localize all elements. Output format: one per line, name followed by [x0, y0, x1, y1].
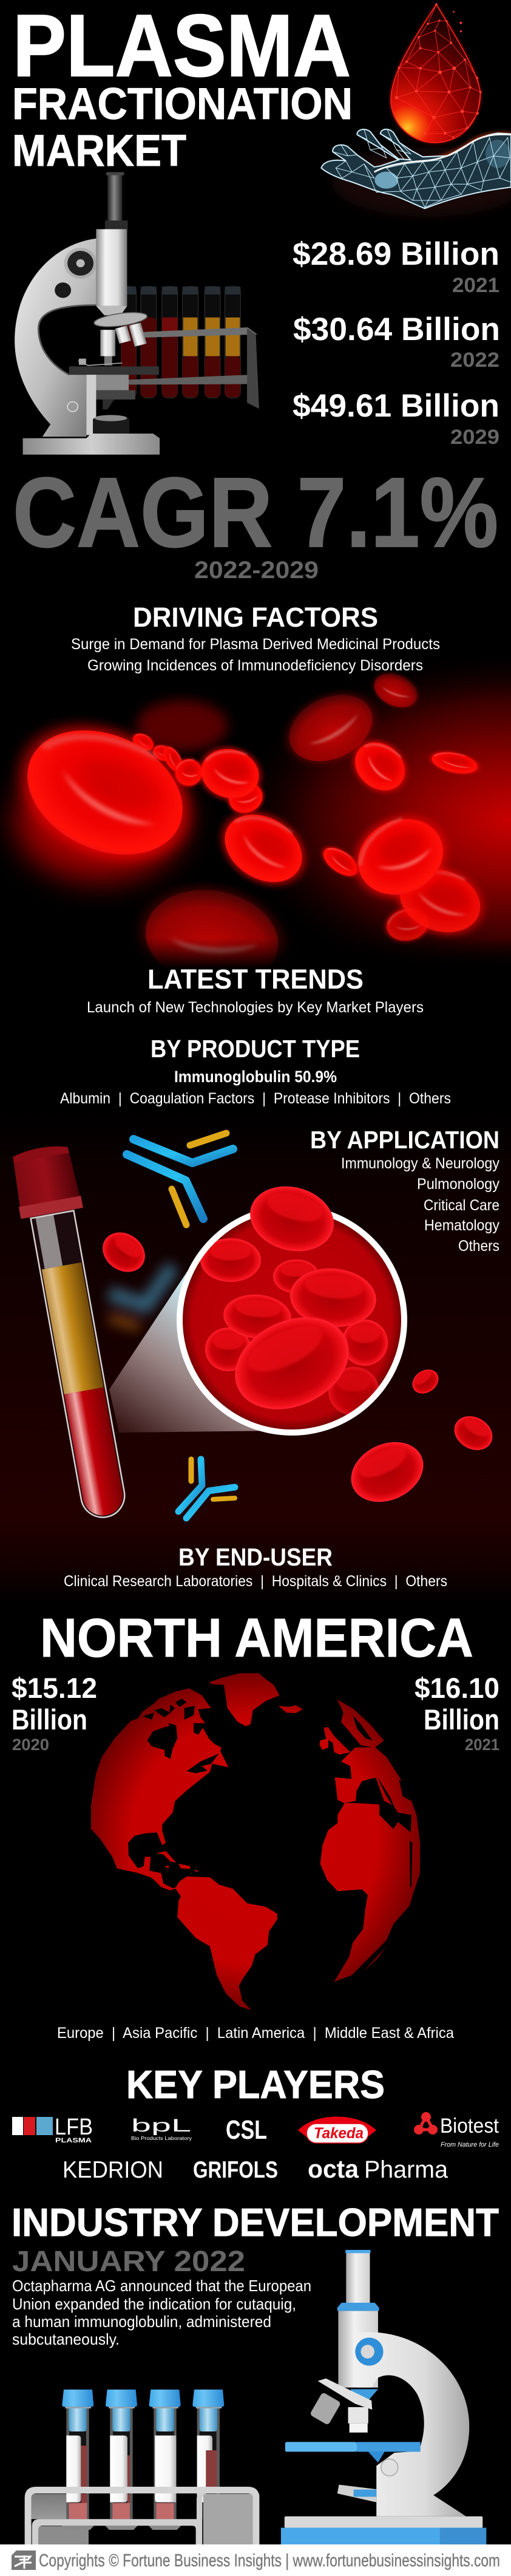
- icon: blood collection tube: [9, 1142, 138, 1522]
- icon: silver microscope: [15, 172, 160, 455]
- logo: Biotest: From Nature for Life: [441, 2141, 499, 2148]
- market size figures: 2029: [450, 426, 499, 449]
- section background: maroon panel: [0, 1111, 511, 1603]
- heading: by application: Hematology: [424, 1217, 499, 1234]
- regional values: $15.12: [12, 1672, 97, 1704]
- icon: white and blue microscope: [281, 2250, 486, 2545]
- icon: blood drop held by wireframe hand: [321, 3, 511, 217]
- logo: Biotest: Biotest: [440, 2114, 499, 2138]
- heading: by end-user: Clinical Research Laboratories | Hospitals & Clinics | Others: [64, 1573, 447, 1590]
- regional values: [12, 1672, 499, 1754]
- heading: latest trends: LATEST TRENDS: [147, 964, 364, 995]
- regional values: 2020: [12, 1736, 49, 1754]
- market size figures: $28.69 Billion: [293, 236, 499, 272]
- heading: north america: NORTH AMERICA: [40, 1608, 473, 1669]
- heading: by application: Critical Care: [424, 1197, 499, 1214]
- heading: latest trends: Launch of New Technologies by Key Market Players: [87, 999, 424, 1016]
- heading: by end-user: [64, 1543, 447, 1590]
- logo: LFB Plasma: PLASMA: [55, 2137, 92, 2144]
- heading: by application: Immunology & Neurology: [341, 1155, 499, 1172]
- regional values: Billion: [12, 1703, 87, 1736]
- development date: JANUARY 2022: [12, 2246, 245, 2278]
- development description: subcutaneously.: [12, 2330, 120, 2348]
- logo: Grifols: GRIFOLS: [193, 2157, 278, 2183]
- magnified blood circle: [180, 1177, 404, 1433]
- regional values: Billion: [424, 1703, 499, 1736]
- title: MARKET: [12, 126, 186, 175]
- logo: LFB Plasma: [12, 2114, 93, 2144]
- heading: key players: KEY PLAYERS: [126, 2062, 385, 2107]
- logo: Kedrion: KEDRION: [63, 2157, 163, 2183]
- heading: driving factors: Growing Incidences of Immunodeficiency Disorders: [87, 657, 423, 674]
- heading: by product type: Immunoglobulin 50.9%: [174, 1068, 337, 1086]
- logo: BPL: [131, 2116, 192, 2141]
- market size figures: 2021: [452, 274, 499, 297]
- logo: LFB Plasma: LFB: [55, 2114, 93, 2140]
- regional values: $16.10: [415, 1672, 499, 1704]
- CAGR figure: 2022-2029: [194, 557, 319, 584]
- icon: test tube rack behind microscope: [121, 287, 259, 409]
- heading: industry development: INDUSTRY DEVELOPMENT: [12, 2200, 499, 2244]
- heading: driving factors: Surge in Demand for Plasma Derived Medicinal Products: [71, 636, 440, 653]
- heading: driving factors: DRIVING FACTORS: [133, 602, 378, 633]
- logo: Octapharma: [308, 2155, 448, 2183]
- market size figures: $30.64 Billion: [293, 312, 500, 347]
- development description: [12, 2277, 311, 2348]
- heading: latest trends: [87, 964, 424, 1016]
- icon: antibody top: [127, 1133, 233, 1225]
- development description: Union expanded the indication for cutaquig,: [12, 2295, 296, 2313]
- free floating blood cells: [95, 1224, 499, 1513]
- heading: by product type: Albumin | Coagulation Factors | Protease Inhibitors | Others: [60, 1090, 451, 1107]
- heading: driving factors: [71, 602, 440, 674]
- icon: antibody bottom: [178, 1459, 235, 1518]
- logo: Octapharma: Pharma: [364, 2156, 448, 2183]
- regional values: 2021: [465, 1736, 499, 1754]
- magnifier beam: [109, 1269, 277, 1433]
- icon: red globe: [91, 1673, 420, 2010]
- heading: by application: Pulmonology: [417, 1176, 499, 1193]
- icon: blurred antibody: [109, 1266, 173, 1327]
- heading: by application: [310, 1126, 499, 1255]
- development description: a human immunoglobulin, administered: [12, 2312, 271, 2331]
- heading: by application: Others: [458, 1238, 499, 1255]
- heading: by end-user: BY END-USER: [178, 1543, 333, 1571]
- logo: Takeda: [298, 2117, 376, 2143]
- logo: Biotest: [414, 2112, 499, 2148]
- icon: Fortune Business Insights logo: [12, 2550, 36, 2570]
- market size figures: $49.61 Billion: [293, 388, 499, 424]
- footer bar: [0, 2544, 511, 2576]
- logo: Takeda: Takeda: [314, 2125, 364, 2142]
- heading: by product type: [60, 1035, 451, 1107]
- logo: CSL: CSL: [226, 2115, 267, 2145]
- other regions list: Europe | Asia Pacific | Latin America | Middle East & Africa: [57, 2025, 454, 2042]
- logo: BPL: bpL: [131, 2116, 191, 2136]
- logo: BPL: Bio Products Laboratory: [131, 2136, 192, 2141]
- title: [12, 0, 353, 175]
- heading: by product type: BY PRODUCT TYPE: [151, 1035, 360, 1063]
- development description: Octapharma AG announced that the European: [12, 2277, 311, 2295]
- illustration: red blood cells: [0, 668, 511, 967]
- heading: by application: BY APPLICATION: [310, 1126, 499, 1154]
- icon: blue capped tubes in rack: [25, 2390, 259, 2544]
- market size figures: [293, 236, 500, 449]
- market size figures: 2022: [450, 349, 499, 372]
- title: FRACTIONATION: [12, 80, 353, 129]
- logo: Octapharma: octa: [308, 2155, 359, 2183]
